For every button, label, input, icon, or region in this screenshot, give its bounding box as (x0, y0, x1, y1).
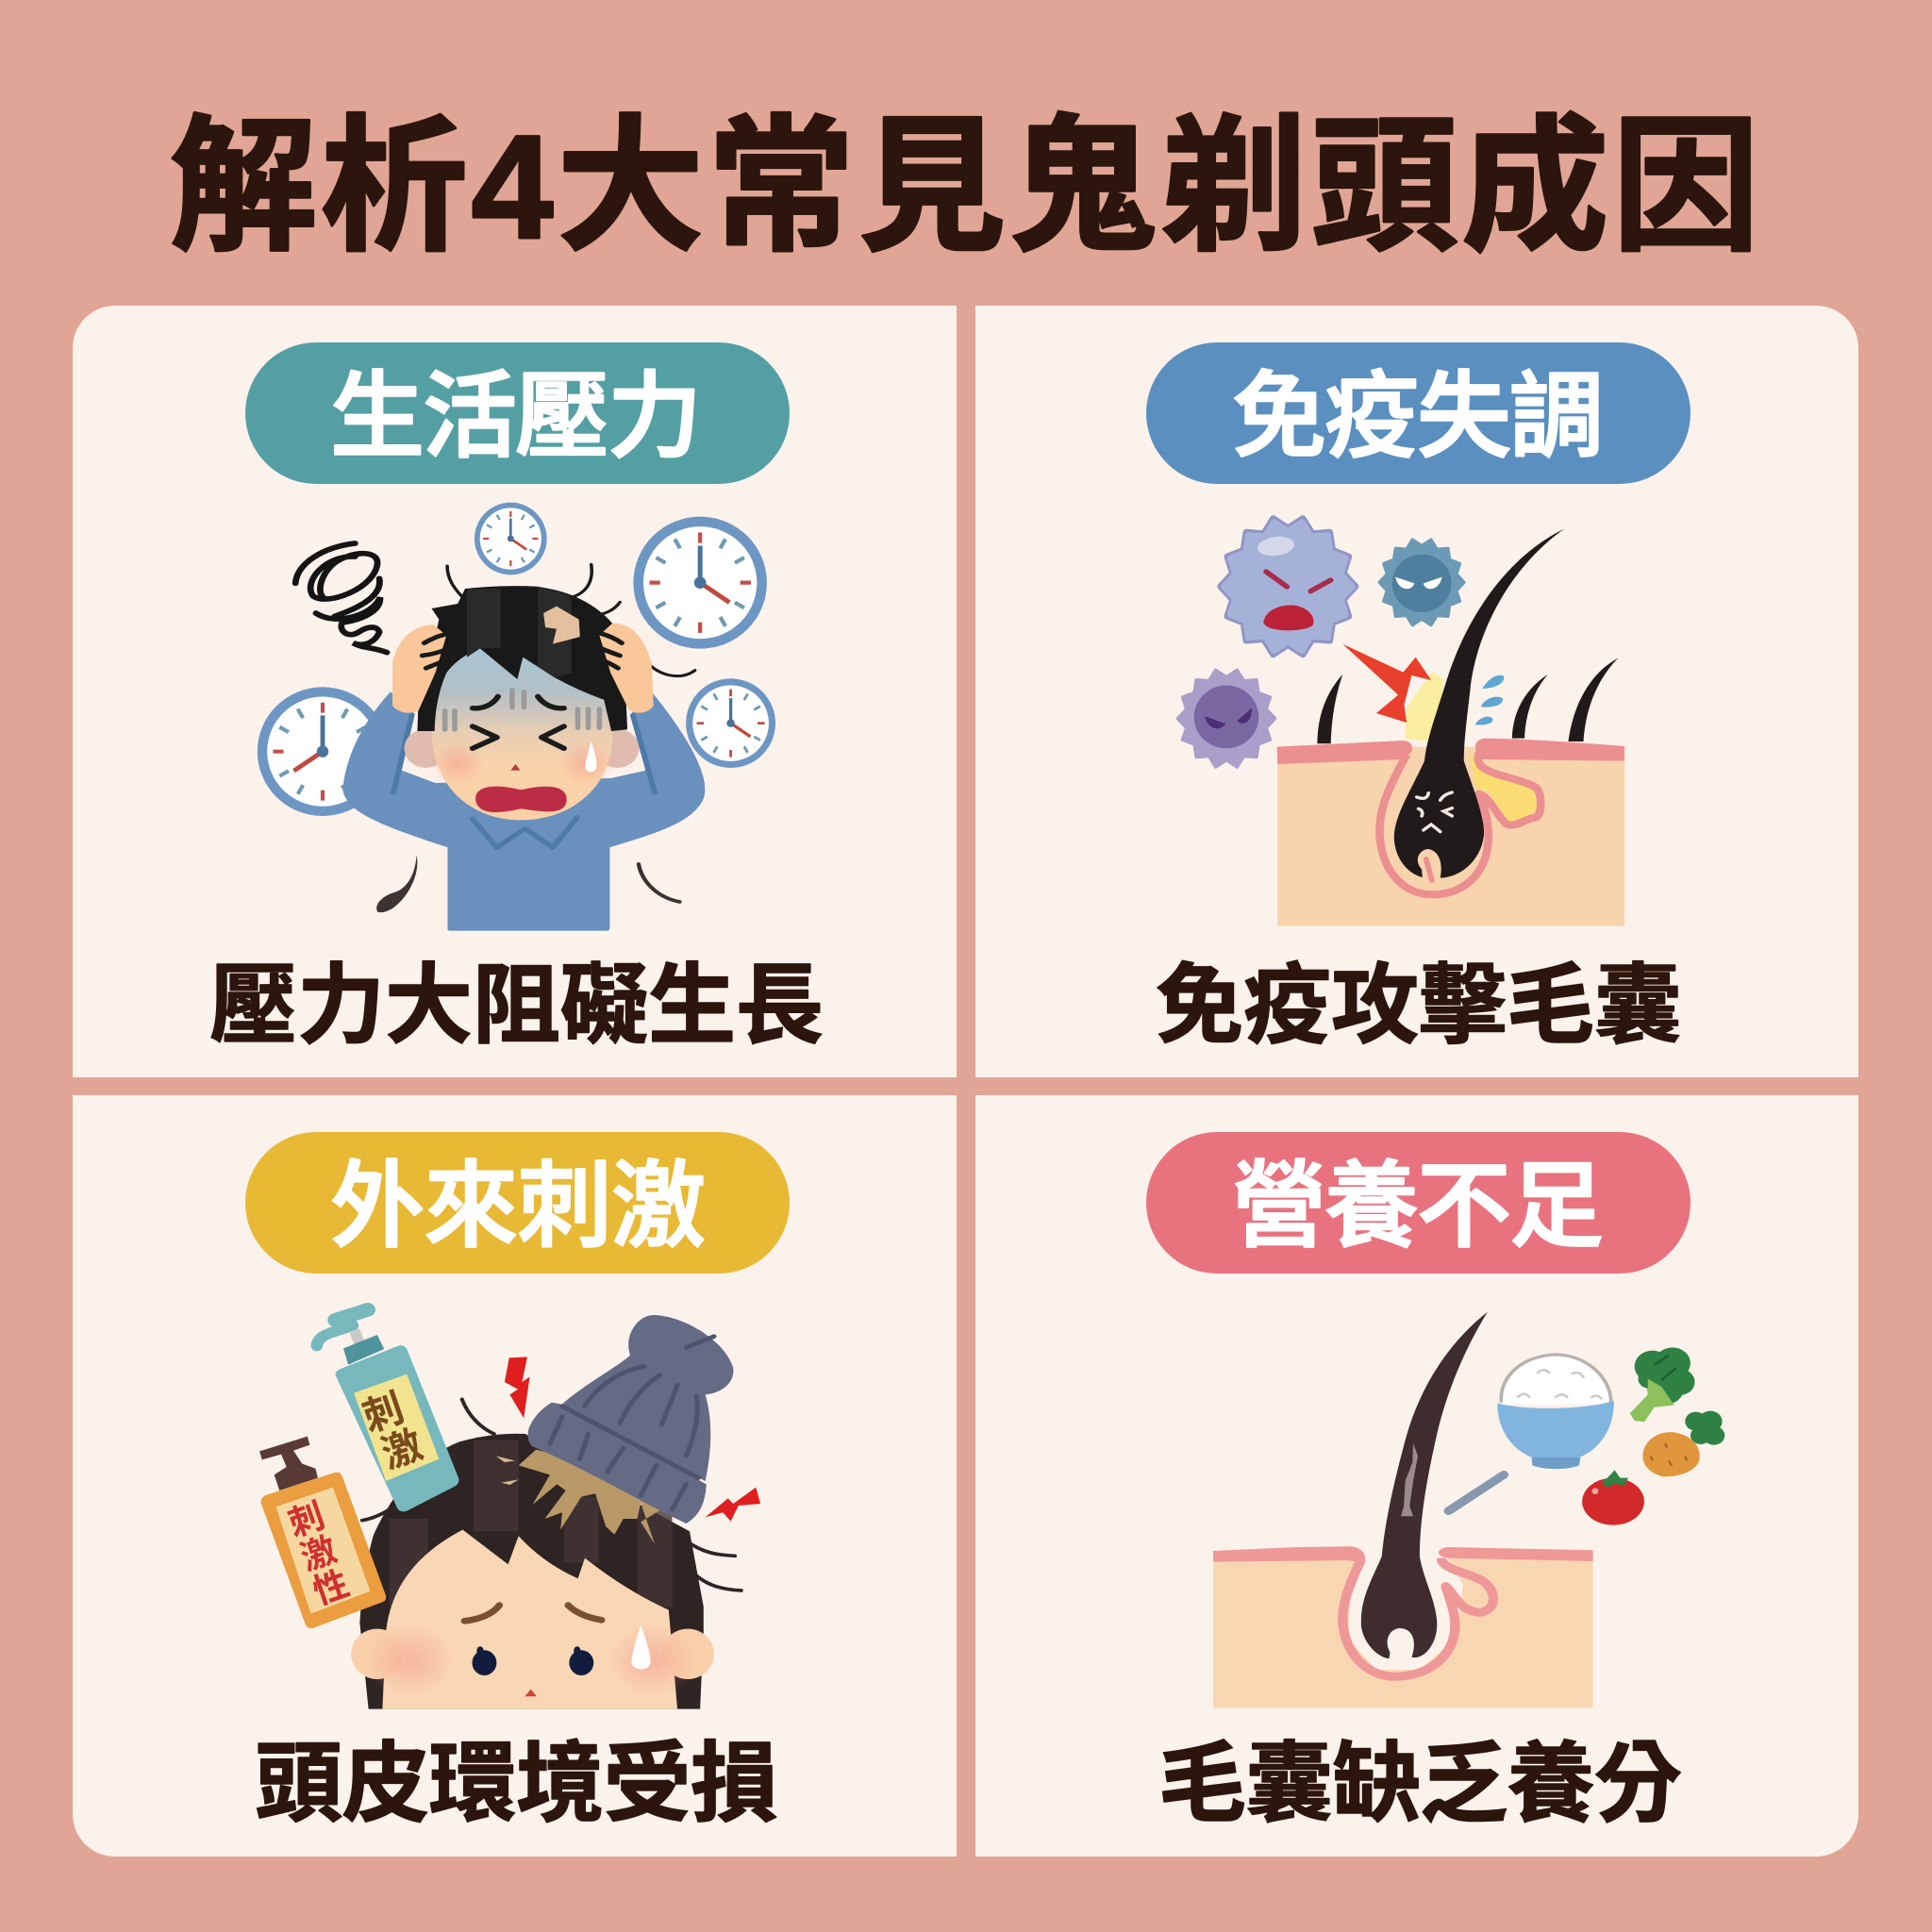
icon: tomato (1582, 1470, 1644, 1525)
panel: 免疫失調 (975, 306, 1858, 1077)
icon: blue germ (1379, 540, 1464, 625)
pill heading: 生活壓力 (245, 342, 790, 484)
caption: 免疫攻擊毛囊: 免疫攻擊毛囊 (1156, 957, 1682, 1055)
illustration: stressed man with clocks (258, 503, 775, 931)
icon: large germ (1221, 519, 1356, 655)
girl: face details (464, 1606, 651, 1696)
sebaceous gland (1469, 752, 1538, 821)
illustration: undernourished follicle (1213, 1312, 1724, 1708)
icon: flash (1405, 672, 1443, 742)
small hairs (1317, 658, 1618, 743)
skin outline and follicle (1379, 750, 1541, 894)
icon: falling hairs (376, 856, 417, 912)
pill heading: 外來刺激: 外來刺激 (330, 1154, 706, 1259)
icon: carrot leaves (1685, 1411, 1724, 1445)
skin outline and follicle (1342, 1558, 1493, 1676)
icon: broccoli (1630, 1347, 1695, 1422)
girl: face (382, 1530, 677, 1709)
hair with face (1394, 529, 1564, 880)
bottle label: 刺激性: 性 (308, 1564, 354, 1612)
panel: 營養不足 (975, 1095, 1858, 1857)
caption: 壓力大阻礙生長: 壓力大阻礙生長 (209, 957, 824, 1055)
hair (1361, 1312, 1488, 1658)
pill heading: 外來刺激 (245, 1132, 790, 1274)
pill heading: 營養不足: 營養不足 (1232, 1154, 1604, 1259)
bottle label: 刺激性 (284, 1496, 354, 1612)
caption: 毛囊缺乏養分: 毛囊缺乏養分 (1158, 1735, 1682, 1833)
girl: ears (351, 1629, 714, 1679)
damaged hair patch (519, 1450, 661, 1544)
man: hands (392, 625, 446, 713)
man: stray hairs (447, 564, 695, 676)
man: face details (445, 691, 599, 812)
icon: purple germ (1177, 670, 1275, 767)
man: ears (405, 729, 639, 768)
bottle label: 刺激: 激 (376, 1422, 428, 1476)
icon: lightning marks (505, 1357, 760, 1522)
skin block (1213, 1555, 1593, 1708)
man: head (432, 641, 612, 820)
stray hairs (362, 1399, 741, 1591)
pill heading: 生活壓力: 生活壓力 (330, 364, 702, 470)
icon: knit hat (528, 1315, 733, 1524)
illustration: irritated scalp (259, 1309, 760, 1709)
arrow bar (1449, 1474, 1504, 1511)
icon: lightning (1342, 644, 1431, 723)
bottle label: 刺激性: 刺 (284, 1496, 329, 1544)
icon: rice bowl (1497, 1355, 1614, 1469)
girl: hair (359, 1434, 704, 1709)
man: sweater (342, 691, 705, 931)
bottle label: 刺激性: 激 (296, 1530, 341, 1578)
man: hair (417, 586, 627, 731)
icon: dizzy scribble (295, 543, 387, 653)
title: 解析4大常見鬼剃頭成因 (170, 106, 1759, 270)
icon: orange vegetable (1642, 1432, 1700, 1476)
caption: 頭皮環境受損: 頭皮環境受損 (255, 1735, 778, 1833)
icon: clocks (258, 503, 775, 816)
follicle opening (1347, 1547, 1463, 1670)
pill heading: 免疫失調 (1146, 342, 1690, 484)
girl: cheeks (365, 1623, 456, 1698)
pill heading: 免疫失調: 免疫失調 (1232, 364, 1604, 470)
man: bald patch (543, 607, 580, 644)
pill heading: 營養不足 (1146, 1132, 1690, 1274)
hair flakes (496, 1456, 519, 1485)
icon: teal bottle (317, 1309, 458, 1511)
bottle label: 刺激: 刺 (358, 1385, 409, 1440)
bottle label: 刺激 (358, 1385, 428, 1476)
icon: sweat drops (1475, 675, 1504, 725)
damaged streak (1401, 1443, 1418, 1516)
icon: orange bottle (259, 1437, 386, 1628)
skin block (1277, 747, 1624, 926)
man: sleeve and collar lines (393, 715, 655, 847)
panel: 外來刺激 (73, 1095, 957, 1857)
illustration: immune attack on follicle (1177, 519, 1624, 926)
panel: 生活壓力 (73, 306, 957, 1077)
